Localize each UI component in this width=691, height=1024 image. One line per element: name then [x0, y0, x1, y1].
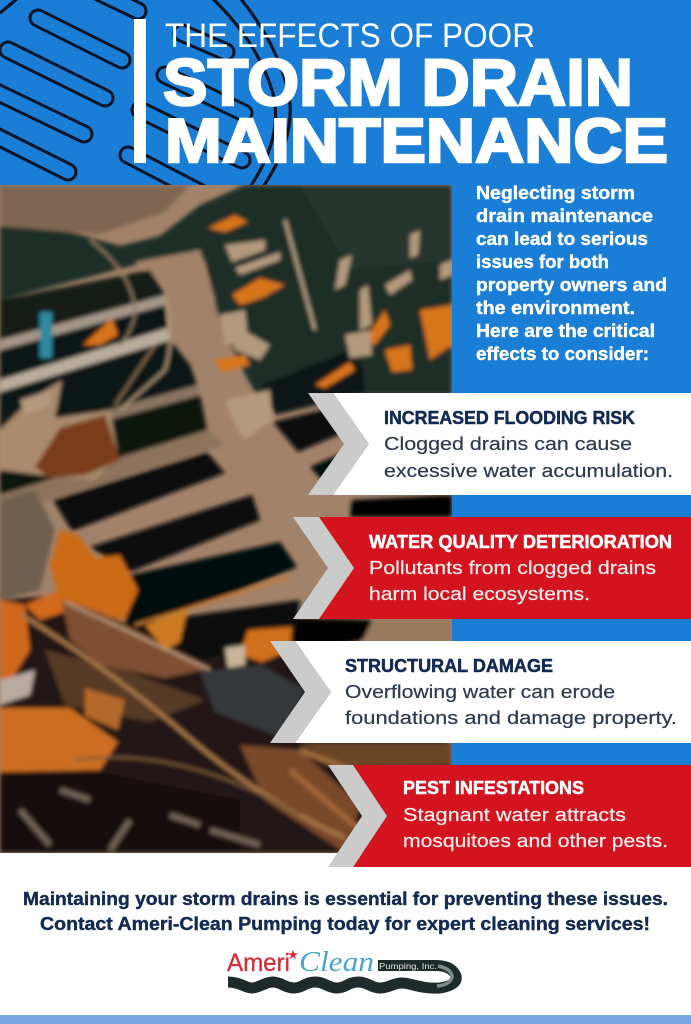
- closing call to action: Maintaining your storm drains is essential for preventing these issues.: [23, 889, 668, 909]
- panel: increased flooding risk: INCREASED FLOODING RISK: [384, 408, 635, 428]
- storm drain photo: [0, 185, 452, 853]
- header drain grate pattern: [0, 0, 290, 195]
- logo: Ameri-Clean Pumping: [227, 947, 456, 988]
- title divider bar: [134, 19, 146, 163]
- title: [163, 17, 668, 176]
- title: MAINTENANCE: [165, 107, 668, 176]
- title: THE EFFECTS OF POOR: [165, 17, 535, 55]
- panel: water quality deterioration: harm local ecosystems.: [369, 584, 590, 604]
- panel: structural damage: Overflowing water can erode: [345, 682, 615, 702]
- logo: Ameri-Clean Pumping: Clean: [299, 947, 374, 978]
- panel: increased flooding risk: excessive water accumulation.: [384, 461, 673, 481]
- panel: pest infestations: Stagnant water attracts: [403, 805, 626, 825]
- intro paragraph: property owners and: [476, 275, 667, 295]
- panel: pest infestations: mosquitoes and other pests.: [403, 831, 668, 851]
- intro paragraph: can lead to serious: [476, 229, 648, 249]
- intro paragraph: Here are the critical: [476, 321, 655, 341]
- intro paragraph: effects to consider:: [476, 344, 649, 364]
- panel: structural damage: foundations and damage property.: [345, 708, 677, 728]
- panel: water quality deterioration: Pollutants from clogged drains: [369, 558, 656, 578]
- title: STORM DRAIN: [163, 45, 633, 119]
- panel: pest infestations: [328, 765, 691, 867]
- panel: structural damage: [270, 641, 691, 743]
- panel: increased flooding risk: Clogged drains can cause: [384, 434, 632, 454]
- closing call to action: [23, 889, 668, 934]
- panel: increased flooding risk: [308, 393, 691, 495]
- panel: water quality deterioration: [293, 517, 691, 619]
- intro paragraph: [476, 183, 667, 364]
- panel: pest infestations: PEST INFESTATIONS: [403, 778, 584, 798]
- logo: Ameri-Clean Pumping: Pumping, Inc.: [379, 961, 437, 971]
- panel: water quality deterioration: WATER QUALITY DETERIORATION: [369, 532, 672, 552]
- logo: Ameri-Clean Pumping: ★: [287, 947, 299, 962]
- intro paragraph: drain maintenance: [476, 206, 653, 226]
- panel: structural damage: STRUCTURAL DAMAGE: [345, 656, 553, 676]
- bottom band: [0, 1015, 691, 1024]
- logo: Ameri-Clean Pumping: Ameri: [227, 949, 290, 977]
- intro paragraph: Neglecting storm: [476, 183, 635, 203]
- intro paragraph: issues for both: [476, 252, 609, 272]
- intro paragraph: the environment.: [476, 298, 635, 318]
- closing call to action: Contact Ameri-Clean Pumping today for expert cleaning services!: [40, 914, 650, 934]
